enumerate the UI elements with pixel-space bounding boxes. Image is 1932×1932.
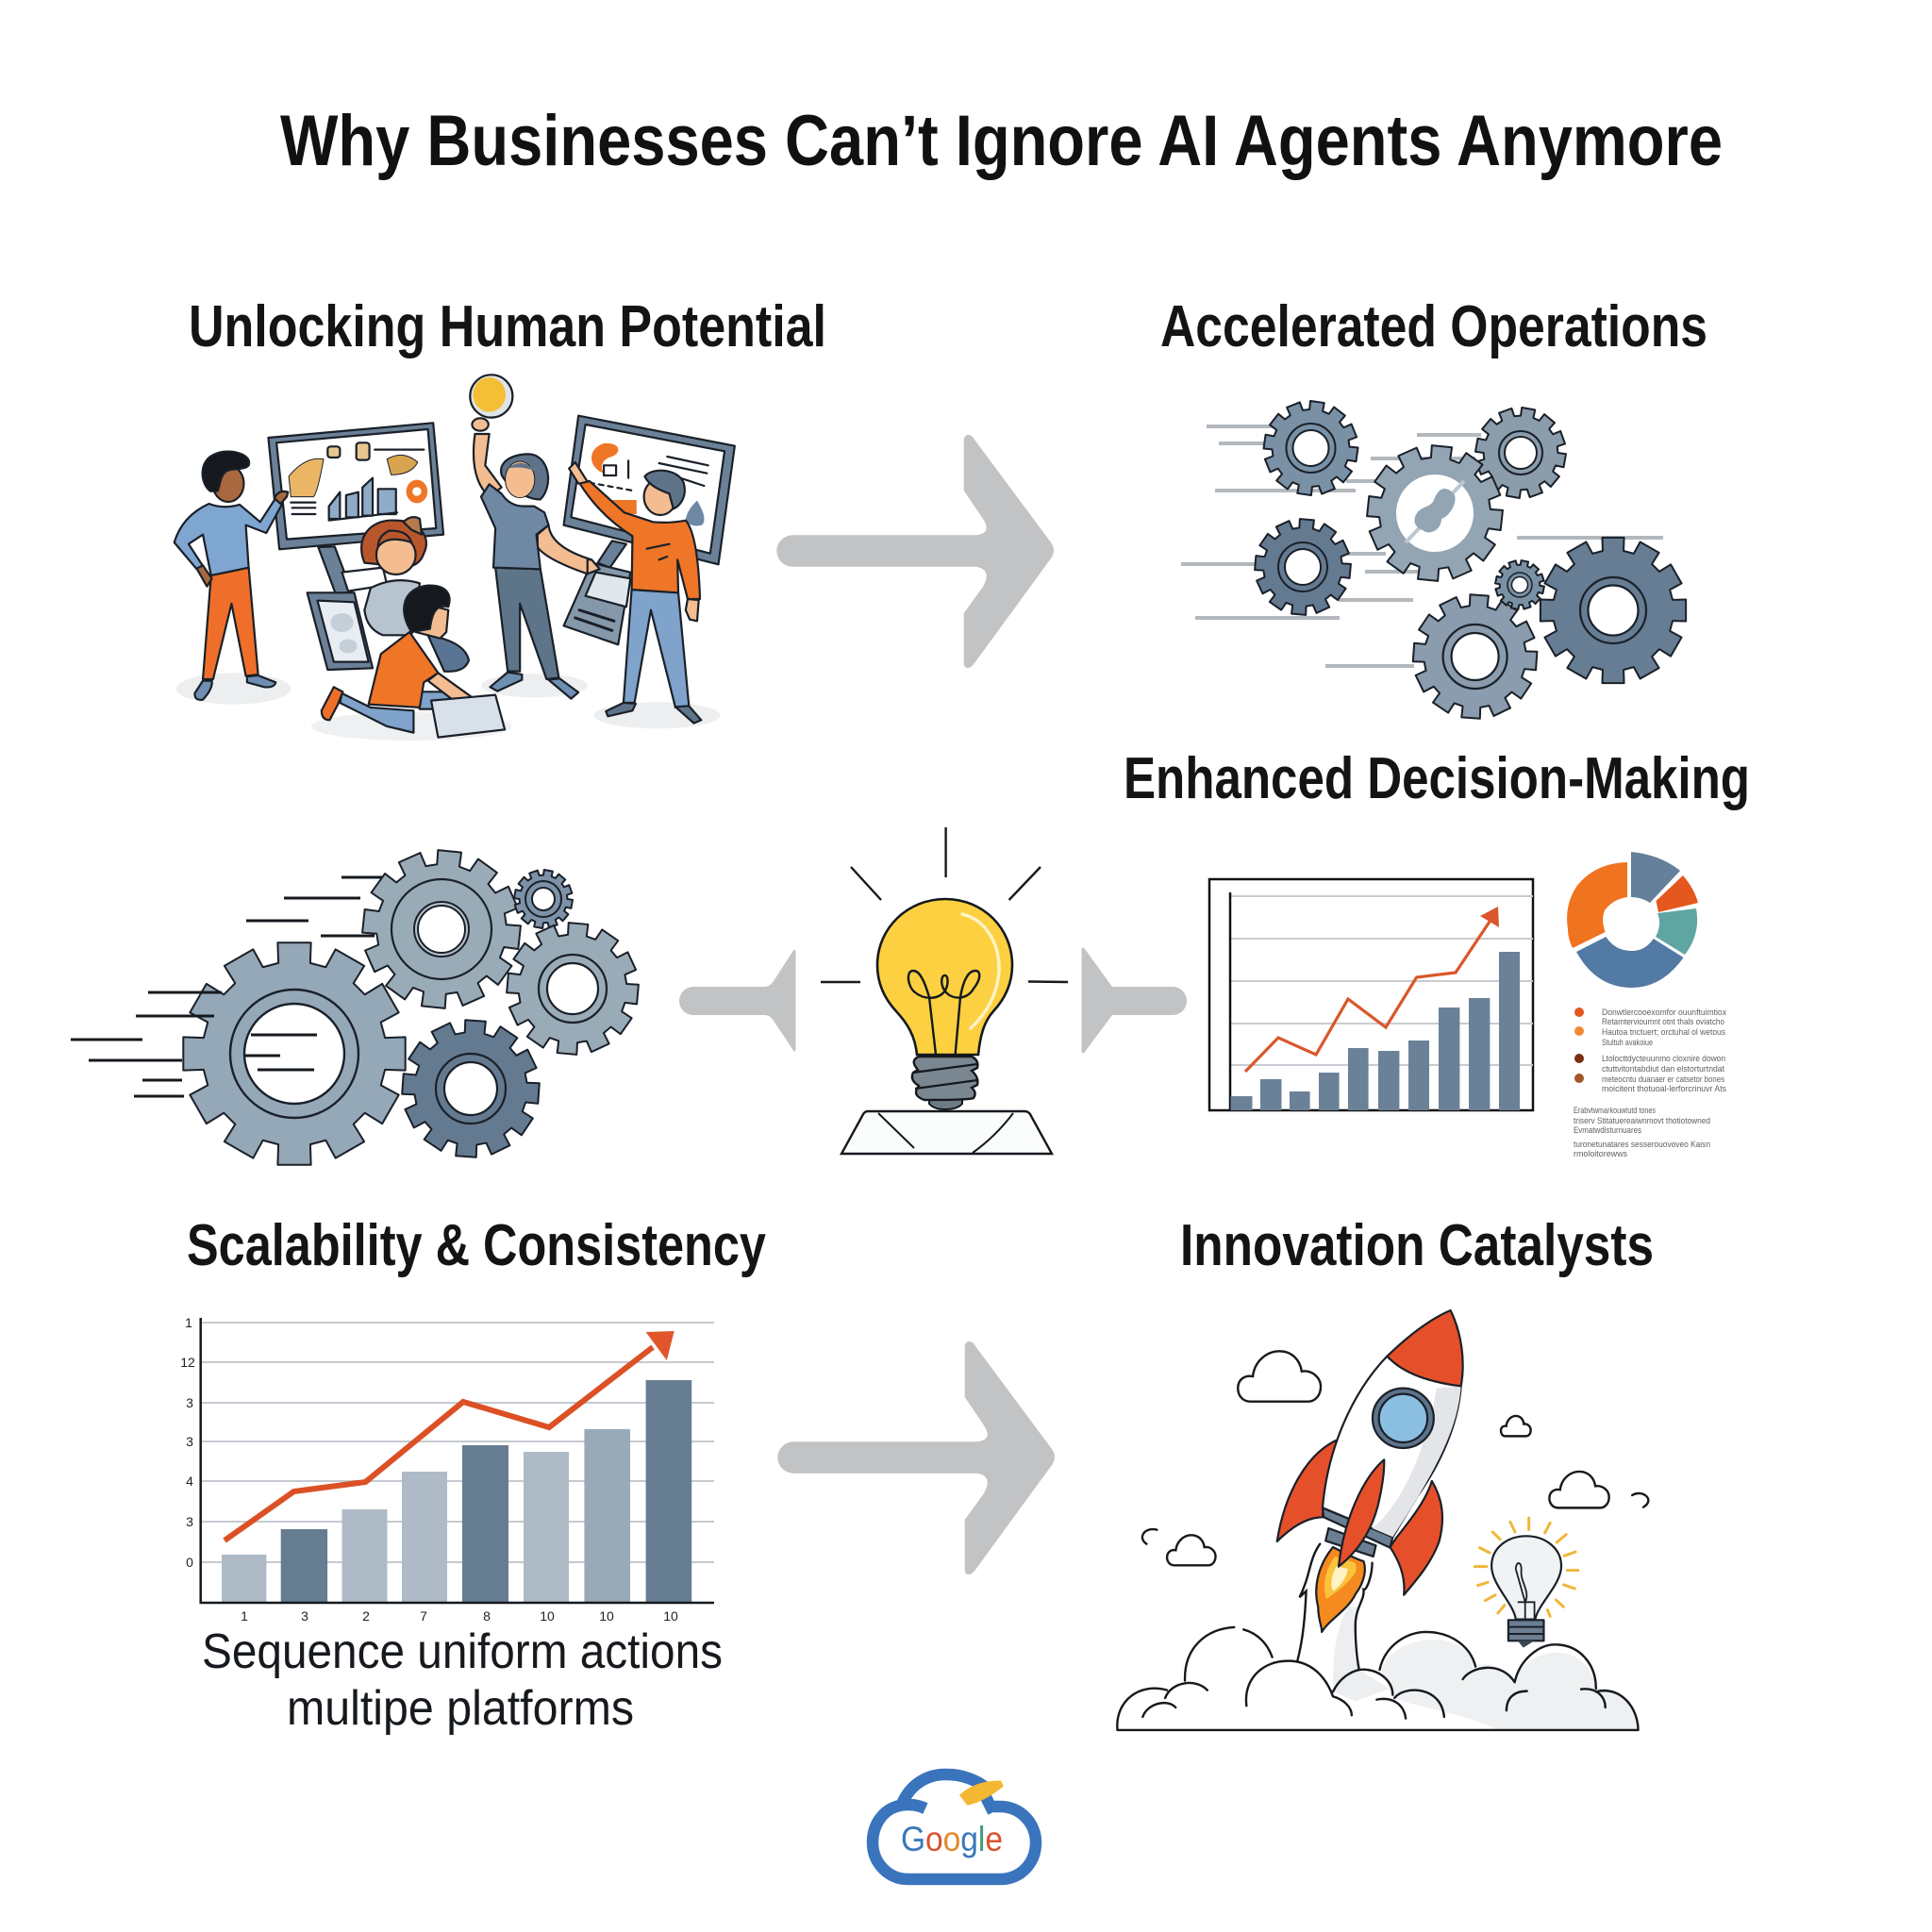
heading: Unlocking Human Potential: Unlocking Human Potential xyxy=(189,294,826,359)
chart: scalability bars and trend: 10 xyxy=(540,1608,555,1624)
person: woman holding up a bulb xyxy=(470,375,600,699)
illustration: rocket launch xyxy=(1117,1310,1648,1730)
chart legend and notes: Hautoa tnctuert; orctuhal ol wetous xyxy=(1602,1027,1725,1037)
logo: Google cloud: Google xyxy=(901,1820,1003,1858)
chart: scalability bars and trend xyxy=(180,1315,714,1624)
chart: enhanced decision-making line and bars xyxy=(1209,879,1533,1110)
small idea bulb xyxy=(1474,1518,1578,1648)
chart: scalability bars and trend: 12 xyxy=(180,1355,195,1370)
icon: scaling gears xyxy=(71,843,643,1165)
person: seated woman with curly hair xyxy=(361,517,426,635)
illustration: team collaborating xyxy=(175,375,735,741)
chart legend and notes: moicitent thotuoal-lerforcrinuvr Ats xyxy=(1602,1084,1726,1093)
chart: scalability bars and trend: 3 xyxy=(186,1434,193,1449)
chart: donut xyxy=(1567,852,1698,988)
chart legend and notes: Stultuh avakoiue xyxy=(1602,1038,1653,1047)
chart: scalability bars and trend: 7 xyxy=(420,1608,427,1624)
chart legend and notes: ctuttvitontabdiut dan elstorturtndat xyxy=(1602,1064,1724,1074)
caption: scalability: Sequence uniform actions xyxy=(202,1624,723,1679)
chart legend and notes: meteocntu duanaer er catsetor bones xyxy=(1602,1074,1724,1084)
chart: scalability bars and trend: 3 xyxy=(301,1608,308,1624)
rocket xyxy=(1277,1310,1463,1632)
chart: scalability bars and trend: 3 xyxy=(186,1514,193,1529)
chart: scalability bars and trend: 10 xyxy=(663,1608,678,1624)
person: presenter in blue xyxy=(175,452,288,700)
chart: scalability bars and trend: 8 xyxy=(483,1608,491,1624)
icon: accelerated gears xyxy=(1181,395,1686,723)
right monitor xyxy=(564,416,735,568)
chart legend and notes: Evmatwdlsturnuares xyxy=(1574,1125,1641,1135)
person: kneeling figure in orange xyxy=(322,586,505,738)
arrow: top right xyxy=(776,435,1054,668)
chart legend and notes: Donwtlercooexomfor ouunftuimtiox xyxy=(1602,1008,1726,1017)
chart: scalability bars and trend: 1 xyxy=(241,1608,248,1624)
small clouds xyxy=(1142,1351,1648,1565)
chart legend and notes: rmoloitorewws xyxy=(1574,1149,1627,1158)
tablet xyxy=(308,592,373,670)
launch clouds xyxy=(1117,1627,1638,1730)
left monitor xyxy=(268,423,443,594)
clipboard xyxy=(564,563,630,644)
chart: scalability bars and trend: 3 xyxy=(186,1395,193,1410)
logo: Google cloud xyxy=(873,1774,1036,1879)
title: Why Businesses Can’t Ignore AI Agents Anymore xyxy=(280,101,1723,181)
caption: scalability: multipe platforms xyxy=(287,1681,634,1736)
chart legend and notes: Retamtervioumnt otnt thals oviatcho xyxy=(1602,1017,1724,1026)
chart: scalability bars and trend: 4 xyxy=(186,1474,193,1489)
chart legend and notes xyxy=(1574,1008,1726,1158)
chart legend and notes: turonetunatares sesserouovoveo Kaisn xyxy=(1574,1140,1710,1149)
heading: Accelerated Operations: Accelerated Operations xyxy=(1160,294,1707,359)
arrow: middle right xyxy=(1081,947,1187,1053)
smoke outlines xyxy=(1297,1544,1373,1670)
chart: scalability bars and trend: 0 xyxy=(186,1555,193,1570)
arrow: bottom right xyxy=(777,1341,1055,1574)
icon: central light bulb xyxy=(821,827,1068,1154)
chart legend and notes: Ltolocttdycteuunmo cloxnire dowon xyxy=(1602,1054,1725,1063)
heading: Innovation Catalysts: Innovation Catalysts xyxy=(1180,1213,1654,1278)
heading: Enhanced Decision-Making: Enhanced Decision-Making xyxy=(1124,746,1750,811)
heading: Scalability & Consistency: Scalability & Consistency xyxy=(187,1213,766,1278)
chart: scalability bars and trend: 1 xyxy=(185,1315,192,1330)
arrow: middle left xyxy=(679,950,796,1052)
chart legend and notes: Erabvtwmarkouwtutd tones xyxy=(1574,1106,1656,1115)
chart: scalability bars and trend: 2 xyxy=(362,1608,370,1624)
chart: scalability bars and trend: 10 xyxy=(599,1608,614,1624)
chart legend and notes: triserv Stitatuereaiwnmovt thotiotowned xyxy=(1574,1116,1710,1125)
person: presenter in orange xyxy=(569,462,701,724)
